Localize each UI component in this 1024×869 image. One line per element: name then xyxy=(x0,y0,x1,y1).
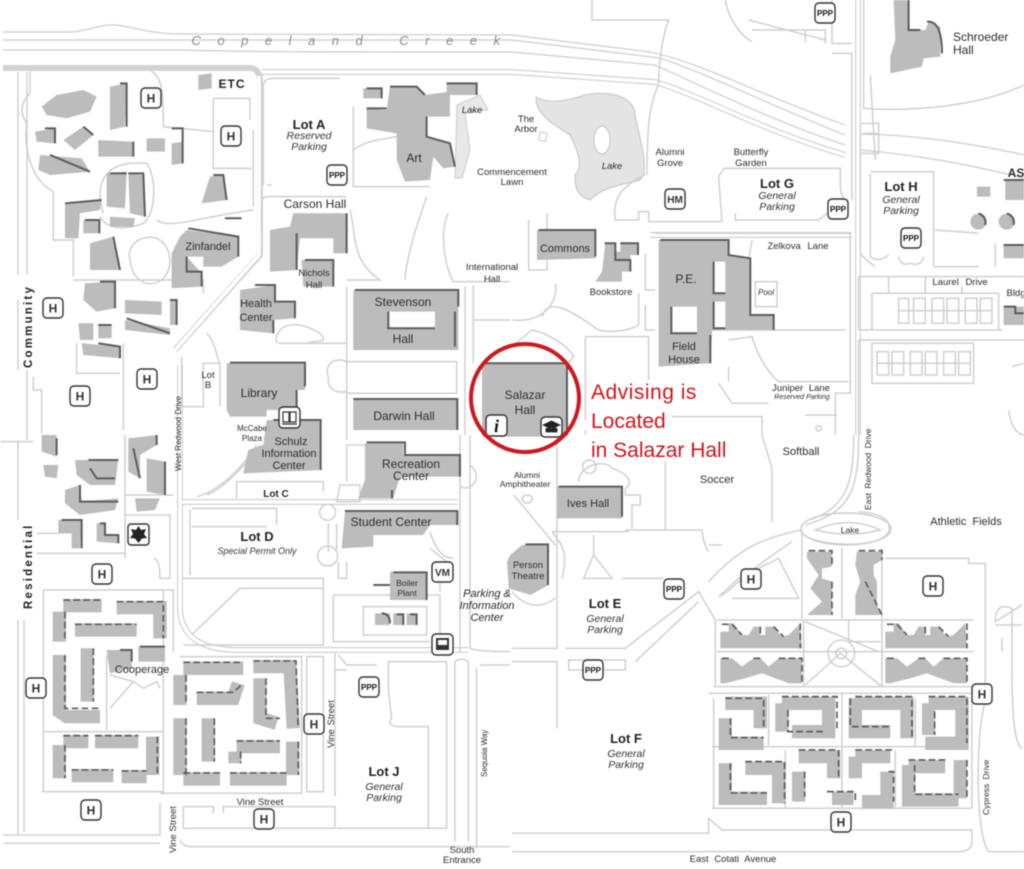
callout: red circle around Salazar Hall xyxy=(471,344,579,452)
label: The Arbor: The xyxy=(518,114,534,125)
label: ETC: ETC xyxy=(218,77,246,91)
label: Boiler Plant: Boiler xyxy=(396,578,418,588)
label: General Parking (G): Parking xyxy=(759,201,795,213)
building: Person Theatre xyxy=(507,544,549,595)
lake: art xyxy=(455,95,488,178)
dorm wings SW xyxy=(59,606,293,779)
label: The Arbor: Arbor xyxy=(514,124,538,135)
label: Juniper Lane: Juniper Lane xyxy=(772,383,830,394)
label: East Redwood Drive: East Redwood Drive xyxy=(863,428,873,510)
label: Lot C: Lot C xyxy=(263,489,289,500)
label: Parking and Information Center: Parking & xyxy=(463,588,511,600)
label: Laurel Drive: Laurel Drive xyxy=(932,277,988,288)
label: Health Center: Health xyxy=(240,298,272,310)
label: Zinfandel: Zinfandel xyxy=(185,241,231,253)
location badges: H: H xyxy=(227,130,235,144)
label: McCabe Plaza: McCabe xyxy=(237,424,267,433)
icon: information xyxy=(486,415,507,436)
label: Person Theatre: Theatre xyxy=(512,571,544,582)
label: Sequoia Way: Sequoia Way xyxy=(480,730,489,777)
badge: VM xyxy=(432,562,453,582)
location badges: H: H xyxy=(310,718,318,732)
location badges: H: H xyxy=(98,568,106,582)
lake: south xyxy=(801,513,891,545)
label: Schulz Information Center: Schulz xyxy=(274,436,308,448)
badge: HM xyxy=(665,189,685,209)
lake: island xyxy=(594,126,610,154)
callout: advising location text: Located xyxy=(591,410,666,433)
building: Student Center xyxy=(342,511,458,548)
label: Softball: Softball xyxy=(783,446,819,458)
label: Reserved Parking: Reserved xyxy=(287,130,333,142)
label: Parking and Information Center: Center xyxy=(470,612,505,624)
label: Nichols Hall: Hall xyxy=(306,280,322,291)
label: Copeland Creek: Copeland Creek xyxy=(192,33,516,48)
location badges: H: H xyxy=(49,302,57,316)
label: General Parking (F): General xyxy=(607,748,645,760)
label: Health Center: Center xyxy=(239,312,273,324)
label: Field House: Field xyxy=(672,341,696,353)
label: Community: Community xyxy=(23,285,35,368)
badge: HM: HM xyxy=(667,195,683,206)
icon: bus xyxy=(432,634,453,655)
parking badges: PPP: PPP xyxy=(361,683,378,692)
label: McCabe Plaza: Plaza xyxy=(242,434,263,443)
building: Carson Hall xyxy=(270,213,347,272)
building: Library xyxy=(227,363,305,417)
label: General Parking (G): General xyxy=(758,190,796,202)
location badges: H: H xyxy=(837,816,845,830)
label: Special Permit Only: Special Permit Only xyxy=(217,546,297,556)
lake and green areas xyxy=(455,93,891,545)
label: Vine Street (south): Vine Street xyxy=(237,797,284,808)
label: Lot B: Lot xyxy=(201,370,215,381)
label: Lot H: Lot H xyxy=(884,179,918,194)
quadrant NE paths and buildings xyxy=(482,0,1024,437)
parking badges: PPP: PPP xyxy=(585,666,602,675)
label: Lot A: Lot A xyxy=(293,117,326,132)
label: Cooperage: Cooperage xyxy=(115,664,169,676)
label: Stevenson Hall: Hall xyxy=(393,332,413,346)
callout: advising location text: Advising is xyxy=(591,381,697,404)
label: General Parking (H): Parking xyxy=(883,205,919,217)
label: Zelkova Lane: Zelkova Lane xyxy=(767,241,829,252)
location badges: H: H xyxy=(87,804,95,818)
icon: information: i xyxy=(494,416,499,436)
building: Nichols Hall xyxy=(302,260,333,287)
label: Commencement Lawn: Lawn xyxy=(501,177,523,188)
label: Field House: House xyxy=(668,354,700,366)
building: Salazar Hall xyxy=(482,363,567,437)
building: Art xyxy=(367,83,477,182)
building: Schroeder Hall xyxy=(890,0,942,73)
label: Pool: Pool xyxy=(758,288,774,297)
parking badges: PPP: PPP xyxy=(817,9,834,18)
label: Parking and Information Center: Information xyxy=(459,600,515,612)
label: Schulz Information Center: Center xyxy=(272,460,306,472)
label: Cypress Drive: Cypress Drive xyxy=(981,759,991,815)
building: Commons xyxy=(537,230,595,260)
building: Recreation Center xyxy=(358,442,460,498)
label: International Hall: Hall xyxy=(484,274,500,285)
label: General Parking (J): General xyxy=(365,781,403,793)
parking badges: PPP: PPP xyxy=(329,171,346,180)
label: Reserved Parking (Juniper): Reserved Parking xyxy=(774,394,830,401)
label: Lake (main): Lake xyxy=(602,161,622,172)
label: General Parking (J): Parking xyxy=(366,792,402,804)
parking badges: PPP: PPP xyxy=(903,234,920,243)
parking badges: PPP xyxy=(327,3,921,697)
label: Butterfly Garden: Garden xyxy=(735,158,767,169)
label: Alumni Amphitheater: Amphitheater xyxy=(500,479,550,489)
label: Vine Street (east): Vine Street xyxy=(326,700,337,748)
building: Zinfandel xyxy=(172,228,238,288)
label: International Hall: International xyxy=(466,262,518,273)
label: Student Center: Student Center xyxy=(351,515,431,529)
label: Lot J: Lot J xyxy=(368,764,400,779)
label: Art: Art xyxy=(406,151,422,165)
building: Ives Hall xyxy=(557,487,622,518)
label: Lot F: Lot F xyxy=(610,731,642,746)
parking badges: PPP: PPP xyxy=(666,585,683,594)
location badges: H: H xyxy=(32,682,40,696)
label: Person Theatre: Person xyxy=(513,560,543,571)
label: Schulz Information Center: Information xyxy=(261,448,317,460)
location badges: H: H xyxy=(978,688,986,702)
label: Alumni Grove: Alumni xyxy=(655,147,685,158)
label: General Parking (E): Parking xyxy=(587,624,623,636)
label: Library: Library xyxy=(241,386,277,400)
building: Darwin Hall xyxy=(353,399,458,430)
label: Lot B: B xyxy=(205,380,211,391)
lake: main xyxy=(536,93,644,200)
location badges: H: H xyxy=(143,372,151,386)
location badges: H: H xyxy=(929,580,937,594)
label: Vine Street (west): Vine Street xyxy=(168,806,179,853)
quadrant SE paths and buildings xyxy=(507,432,1024,852)
label: South Entrance: Entrance xyxy=(443,855,481,866)
label: Recreation Center: Recreation xyxy=(382,457,440,471)
label: Athletic Fields: Athletic Fields xyxy=(930,516,1002,528)
label: Soccer: Soccer xyxy=(700,474,734,486)
label: Darwin Hall: Darwin Hall xyxy=(373,409,435,423)
label: West Redwood Drive: West Redwood Drive xyxy=(174,395,183,471)
icon: star xyxy=(128,524,149,545)
label: Commons: Commons xyxy=(540,243,591,255)
label: General Parking (E): General xyxy=(586,613,624,625)
quadrant NW paths and buildings xyxy=(22,72,510,440)
label: Salazar Hall: Salazar xyxy=(505,388,545,402)
label: Schroeder Hall: Schroeder xyxy=(953,30,1008,44)
callout: advising location text: in Salazar Hall xyxy=(591,439,726,462)
location badges: H: H xyxy=(260,812,268,826)
label: General Parking (F): Parking xyxy=(608,759,644,771)
icon: book xyxy=(279,407,300,428)
label: AS: AS xyxy=(1008,166,1024,180)
label: Carson Hall: Carson Hall xyxy=(284,197,346,211)
building: Stevenson Hall xyxy=(353,290,458,350)
label: Alumni Amphitheater: Alumni xyxy=(514,470,540,480)
label: Alumni Grove: Grove xyxy=(657,158,683,169)
label: Lot G: Lot G xyxy=(760,176,794,191)
quadrant SW paths and buildings xyxy=(1,420,510,848)
label: Lot D: Lot D xyxy=(240,529,274,544)
parking badges: PPP: PPP xyxy=(830,205,847,214)
label: Butterfly Garden: Butterfly xyxy=(734,147,769,158)
dorm rings SE xyxy=(725,698,962,803)
label: Nichols Hall: Nichols xyxy=(298,268,330,279)
label: Lake (art): Lake xyxy=(462,105,482,116)
label: Schroeder Hall: Hall xyxy=(953,43,974,57)
label: Salazar Hall: Hall xyxy=(515,403,535,417)
Copeland Creek banks xyxy=(3,25,1024,178)
label: South Entrance: South xyxy=(450,845,474,856)
label: Recreation Center: Center xyxy=(393,469,429,483)
building: Bookstore xyxy=(595,243,638,282)
badge: VM: VM xyxy=(435,568,450,579)
label: Reserved Parking: Parking xyxy=(291,141,327,153)
label: General Parking (H): General xyxy=(882,194,920,206)
icon: graduation cap xyxy=(541,417,562,437)
dorm columns and rows SE xyxy=(720,552,967,683)
location badges: H: H xyxy=(76,390,84,404)
label: Bookstore: Bookstore xyxy=(590,287,632,298)
label: Lake (south): Lake xyxy=(841,525,859,535)
label: East Cotati Avenue: East Cotati Avenue xyxy=(690,854,776,865)
location badges: H: H xyxy=(747,572,755,586)
building: Boiler Plant xyxy=(373,572,427,600)
building: ETC xyxy=(198,73,212,90)
label: Stevenson Hall: Stevenson xyxy=(375,295,431,309)
label: Boiler Plant: Plant xyxy=(397,588,417,598)
label: Lot E: Lot E xyxy=(589,596,622,611)
building: Schulz Information Center xyxy=(243,420,322,473)
label: Ives Hall: Ives Hall xyxy=(567,498,609,510)
location badges: H: H xyxy=(147,92,155,106)
label: Commencement Lawn: Commencement xyxy=(477,167,547,178)
label: Residential: Residential xyxy=(23,523,35,609)
label: P.E.: P.E. xyxy=(675,272,697,286)
building: P.E. and Field House xyxy=(659,240,774,367)
building: Health Center xyxy=(240,285,295,333)
